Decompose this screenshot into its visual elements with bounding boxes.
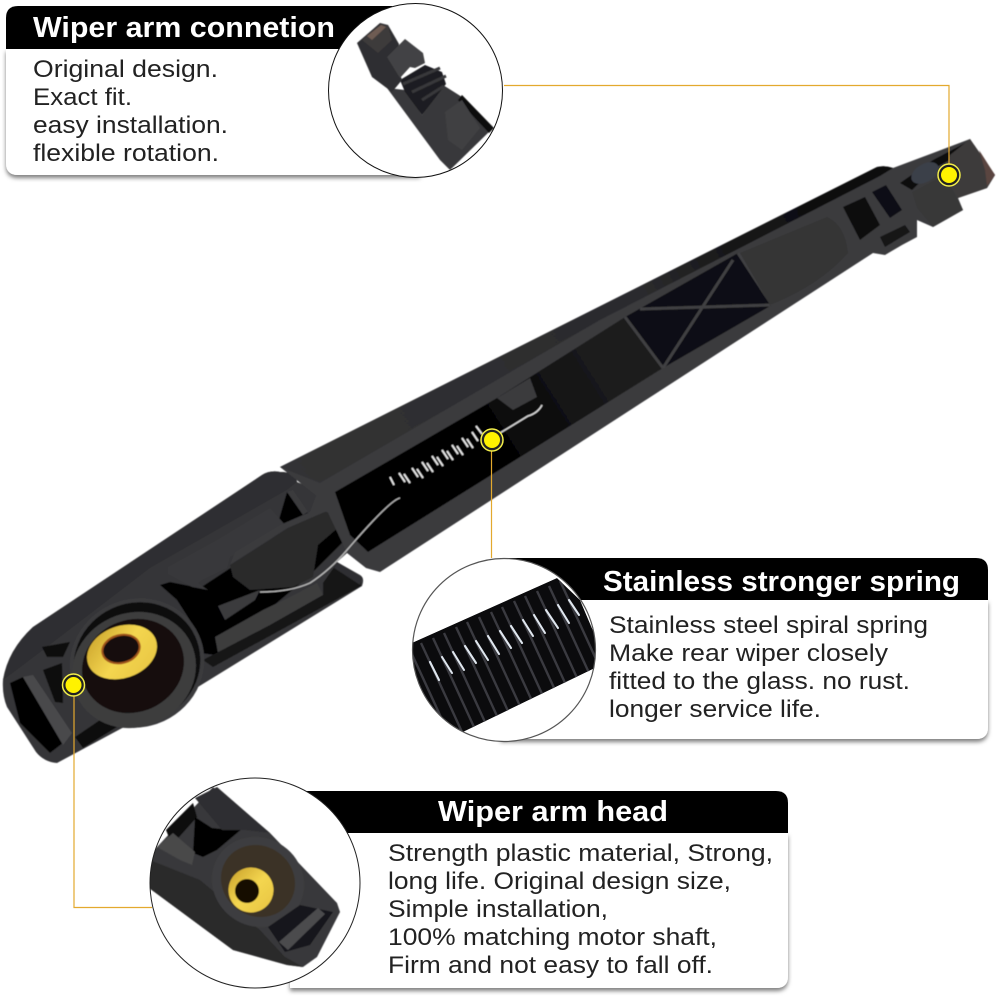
embossed oval panel [740,217,848,305]
header bar [500,558,988,600]
description text: Exact fit. [33,84,132,111]
leader line: spring [490,440,492,558]
heading: Stainless stronger spring [603,566,960,598]
wiper arm photo illustration [3,139,995,763]
description text: flexible rotation. [33,140,219,167]
heading: Wiper arm connetion [33,12,335,44]
panel card [6,49,420,175]
detail circle: spring coil [412,558,596,742]
marker: spring [481,429,503,451]
leader line: head [74,685,152,908]
header bar [290,791,788,833]
panel: wiper arm head [145,778,788,988]
brass insert socket [51,579,223,748]
coil spring [390,426,482,485]
description text: fitted to the glass. no rust. [609,668,910,695]
panel card [500,600,988,739]
description text: longer service life. [609,696,821,723]
description text: Stainless steel spiral spring [609,612,928,639]
arm head body [3,471,363,763]
upper latch [168,508,287,590]
detail circle: head with brass insert [145,778,360,988]
description text: easy installation. [33,112,228,139]
X brace section [625,253,772,368]
description text: Make rear wiper closely [609,640,888,667]
lower latch [215,583,323,653]
leader line: connection [504,86,949,175]
hook wire [260,498,400,592]
panel: wiper arm connection [6,4,502,178]
spring wire [500,405,542,433]
connector end detail [843,139,995,247]
description text [33,56,228,167]
panel: stainless stronger spring [405,558,988,760]
marker: head [62,674,84,696]
description text: Firm and not easy to fall off. [388,952,713,979]
lower tab [203,563,361,667]
description text: long life. Original design size, [388,868,731,895]
detail circle: connector [328,4,502,178]
arm main body [280,139,995,572]
left end pockets [10,677,63,753]
description text [388,840,773,979]
heading: Wiper arm head [438,796,668,828]
marker: connection [938,164,960,186]
description text: 100% matching motor shaft, [388,924,717,951]
description text: Original design. [33,56,218,83]
description text: Simple installation, [388,896,608,923]
description text: Strength plastic material, Strong, [388,840,773,867]
description text [609,612,928,723]
curved collar shoe [230,512,347,590]
panel card [290,833,788,988]
header bar [6,6,392,49]
